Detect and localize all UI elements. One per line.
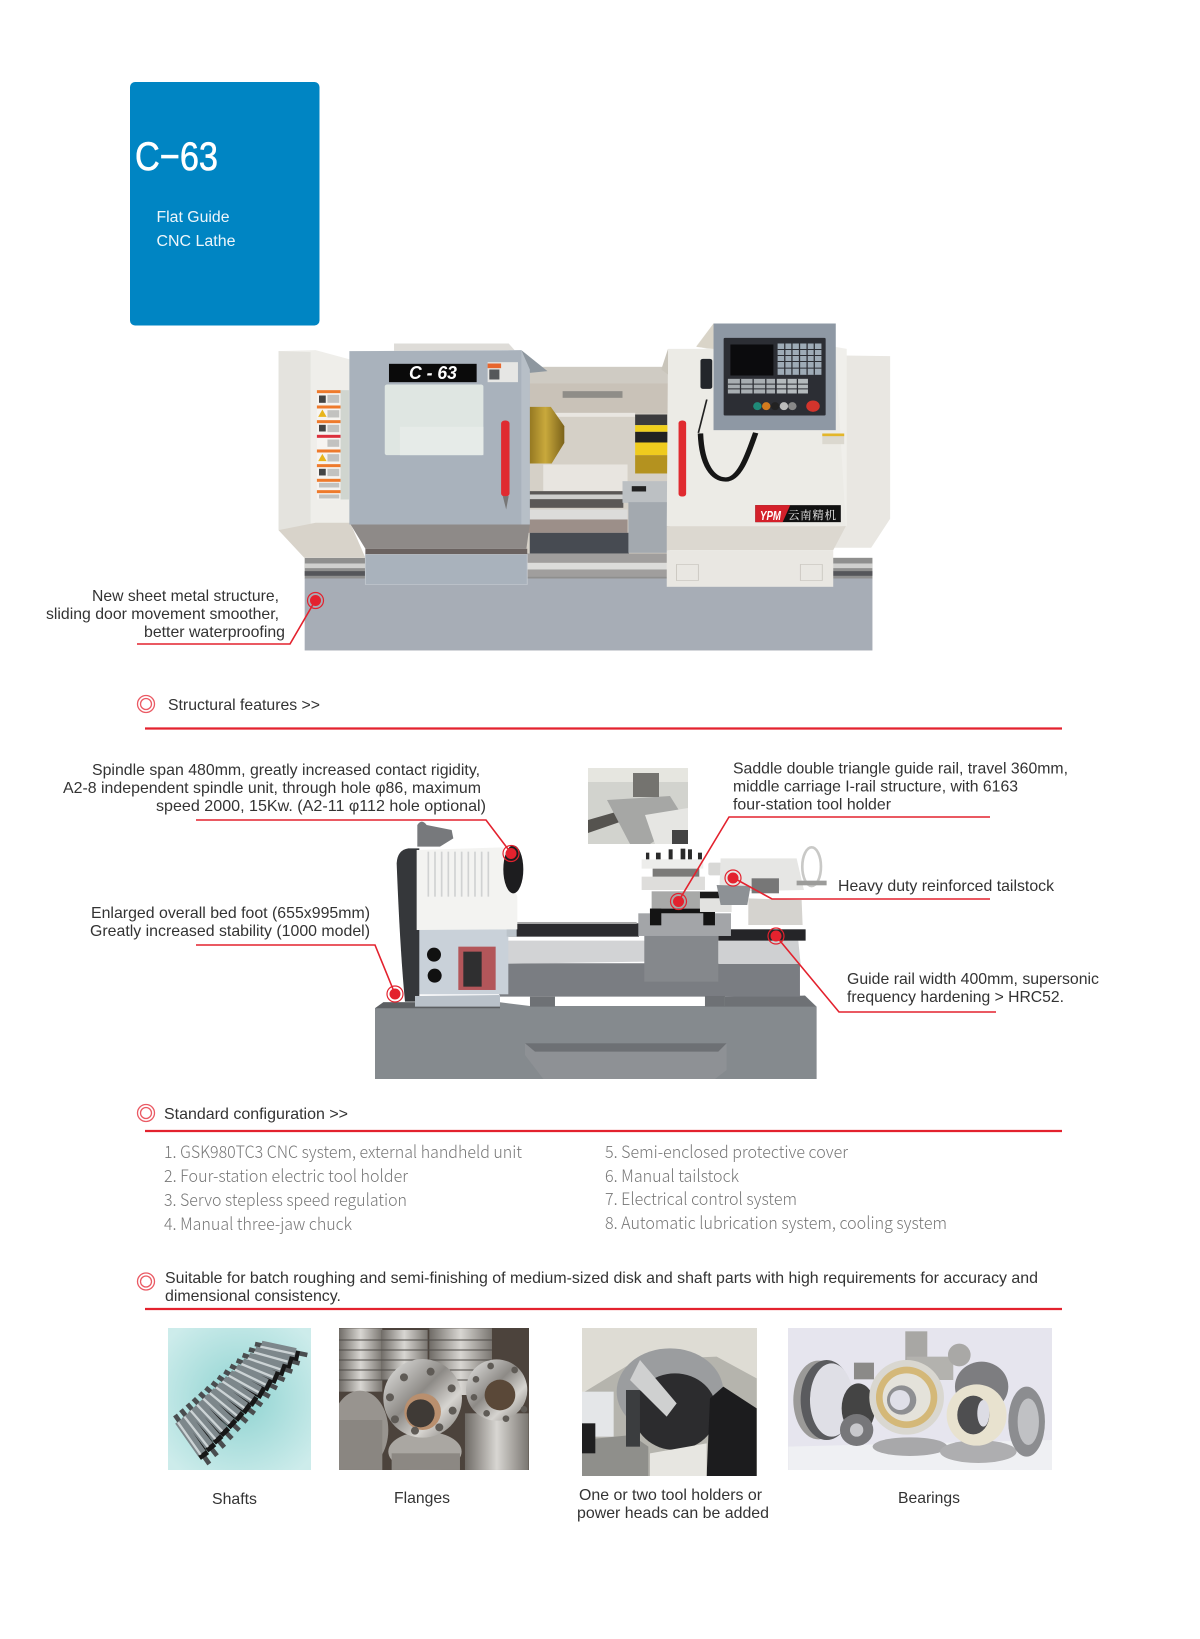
right door: [667, 323, 846, 526]
sliding door: [394, 343, 515, 351]
callout: sheet metal structure: [46, 588, 324, 644]
callout text: [46, 588, 285, 641]
list: standard configuration items, right: 8. Automatic lubrication system, cooling system: [605, 1209, 947, 1234]
machine photo: enclosed CNC lathe: C - 63: [409, 363, 457, 383]
callout: spindle: [63, 762, 519, 862]
section heading: standard configuration: Standard configuration >>: [164, 1106, 348, 1123]
list: standard configuration items, left: [164, 1138, 522, 1235]
machine type: [156, 209, 236, 250]
tailstock: [700, 847, 827, 925]
chuck: [526, 407, 564, 463]
tool post and saddle: [642, 849, 732, 925]
list: standard configuration items, left: 2. Four-station electric tool holder: [164, 1162, 409, 1187]
section heading: suitable applications: [138, 1270, 1062, 1309]
tool holder: [622, 414, 668, 553]
callout text: [847, 971, 1099, 1006]
machine type: Flat Guide: [156, 209, 230, 226]
section heading: standard configuration: [138, 1104, 1062, 1131]
lathe photo: open bed with callouts: [375, 822, 827, 1079]
caption: tool holders: One or two tool holders or: [579, 1487, 762, 1504]
callout text: frequency hardening > HRC52.: [847, 989, 1064, 1006]
cast base: [375, 996, 817, 1079]
section heading: structural features: [138, 696, 1062, 728]
list: standard configuration items, right: [605, 1138, 947, 1234]
photo: flanges: [332, 1328, 529, 1472]
control panel: [696, 323, 836, 430]
section heading: suitable applications: dimensional consistency.: [165, 1288, 341, 1305]
callout text: better waterproofing: [144, 624, 285, 641]
callout: tailstock: Heavy duty reinforced tailstock: [838, 878, 1054, 895]
caption: shafts: Shafts: [212, 1491, 257, 1508]
callout: bed foot: [90, 905, 403, 1002]
callout text: [63, 762, 486, 815]
left side cover: [279, 350, 365, 558]
photo: shafts: [168, 1328, 311, 1470]
list: standard configuration items, right: 6. Manual tailstock: [605, 1162, 739, 1187]
callout text: Greatly increased stability (1000 model): [90, 923, 370, 940]
callout text: four-station tool holder: [733, 796, 891, 814]
callout: tailstock: [725, 870, 1054, 899]
bed casting: [488, 963, 800, 997]
photo: tool holder and power head: [582, 1328, 757, 1476]
model name: C−63: [135, 135, 218, 179]
bed: [305, 578, 872, 650]
photo: bearings: [788, 1328, 1052, 1470]
right side cover: [833, 355, 890, 548]
list: standard configuration items, right: 5. Semi-enclosed protective cover: [605, 1138, 849, 1163]
list: standard configuration items, left: 4. Manual three-jaw chuck: [164, 1210, 352, 1235]
badge: model title panel: [130, 82, 320, 326]
callout text: Enlarged overall bed foot (655x995mm): [91, 905, 370, 922]
callout text: sliding door movement smoother,: [46, 606, 279, 623]
caption: flanges: Flanges: [394, 1490, 450, 1507]
callout text: [733, 760, 1068, 814]
warning labels: [317, 390, 349, 499]
badge plate: [755, 505, 841, 522]
section heading: structural features: Structural features >>: [168, 697, 320, 714]
callout text: Spindle span 480mm, greatly increased contact rigidity,: [92, 762, 480, 779]
callout text: speed 2000, 15Kw. (A2-11 φ112 hole optional): [156, 798, 486, 815]
callout: saddle guide rail: [670, 760, 1068, 910]
callout text: middle carriage I-rail structure, with 6163: [733, 778, 1018, 796]
callout text: New sheet metal structure,: [92, 588, 279, 605]
machine photo: enclosed CNC lathe: 云南精机: [788, 507, 836, 523]
caption: tool holders: [577, 1487, 769, 1522]
inset photo: saddle close-up: [588, 768, 688, 844]
machine photo: enclosed CNC lathe: [279, 323, 890, 650]
caption: tool holders: power heads can be added: [577, 1505, 769, 1522]
callout text: Saddle double triangle guide rail, travel 360mm,: [733, 760, 1068, 778]
callout text: A2-8 independent spindle unit, through hole φ86, maximum: [63, 780, 481, 797]
callout: guide rail width: [768, 928, 1099, 1012]
list: standard configuration items, left: 3. Servo stepless speed regulation: [164, 1186, 407, 1211]
section heading: suitable applications: Suitable for batch roughing and semi-finishing of medium-sized disk and shaft parts with high requirements for accuracy and: [165, 1270, 1038, 1287]
headstock: [397, 822, 523, 1007]
callout text: Guide rail width 400mm, supersonic: [847, 971, 1099, 988]
control cable: [700, 433, 756, 479]
list: standard configuration items, right: 7. Electrical control system: [605, 1185, 797, 1210]
callout text: [90, 905, 370, 940]
machine type: CNC Lathe: [156, 233, 236, 250]
list: standard configuration items, left: 1. GSK980TC3 CNC system, external handheld unit: [164, 1138, 522, 1163]
caption: bearings: Bearings: [898, 1490, 960, 1507]
machine photo: enclosed CNC lathe: YPM: [760, 508, 782, 523]
saddle apron: [644, 935, 718, 982]
interior: [526, 374, 670, 556]
